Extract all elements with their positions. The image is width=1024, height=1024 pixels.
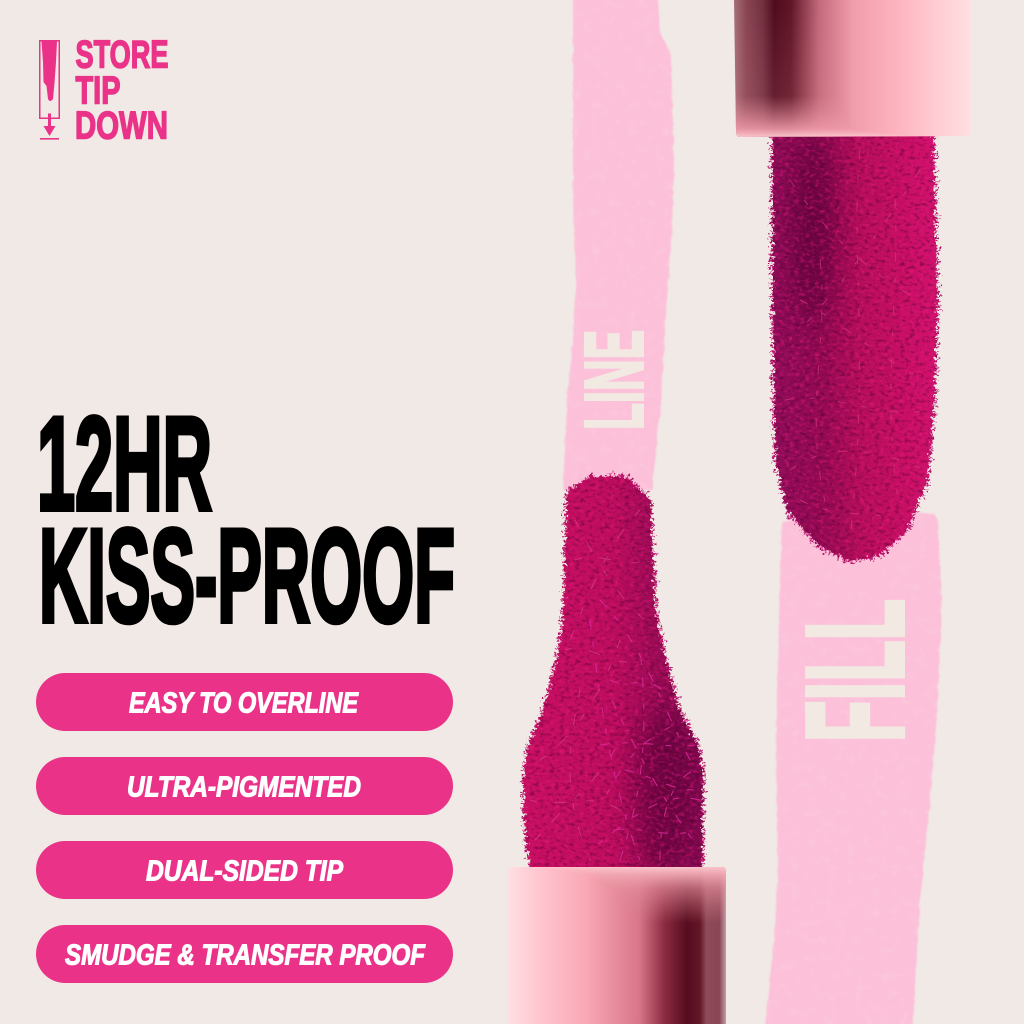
pill: smudge and transfer proof: SMUDGE & TRANSFER PROOF — [65, 940, 426, 972]
brush body — [773, 130, 937, 561]
headline: KISS-PROOF — [39, 502, 455, 650]
store tip down label: STORE — [76, 33, 168, 76]
pill: ultra-pigmented — [36, 757, 453, 815]
fill swatch stripe — [764, 509, 942, 1024]
headline — [37, 390, 455, 650]
icon: applicator stored tip down — [39, 40, 60, 140]
pill: ultra-pigmented: ULTRA-PIGMENTED — [127, 772, 361, 804]
line label: LINE — [568, 330, 660, 430]
pill: easy to overline: EASY TO OVERLINE — [129, 688, 359, 720]
pill: dual-sided tip — [36, 841, 453, 899]
line swatch stripe — [563, 0, 674, 490]
pill: dual-sided tip: DUAL-SIDED TIP — [146, 856, 344, 888]
store tip down badge — [39, 33, 168, 147]
brush body — [524, 476, 703, 880]
fill brush fibres — [785, 150, 930, 540]
bristle fringe — [773, 130, 937, 561]
liner applicator cap — [508, 867, 726, 1024]
store tip down label: TIP — [76, 69, 120, 112]
infographic canvas: FILL — [778, 599, 932, 742]
pill: easy to overline — [36, 673, 453, 731]
fill applicator tip — [773, 130, 937, 561]
brush shadow — [635, 705, 695, 875]
fill applicator cap — [734, 0, 971, 137]
feature pills — [36, 673, 453, 983]
liner applicator tip — [524, 476, 703, 880]
brush shadow — [792, 130, 832, 330]
bristle fringe — [524, 476, 703, 880]
pill: smudge and transfer proof — [36, 925, 453, 983]
liner brush fibres — [530, 510, 700, 860]
headline: 12HR — [37, 390, 212, 538]
store tip down label — [75, 33, 168, 147]
store tip down label: DOWN — [75, 104, 168, 147]
